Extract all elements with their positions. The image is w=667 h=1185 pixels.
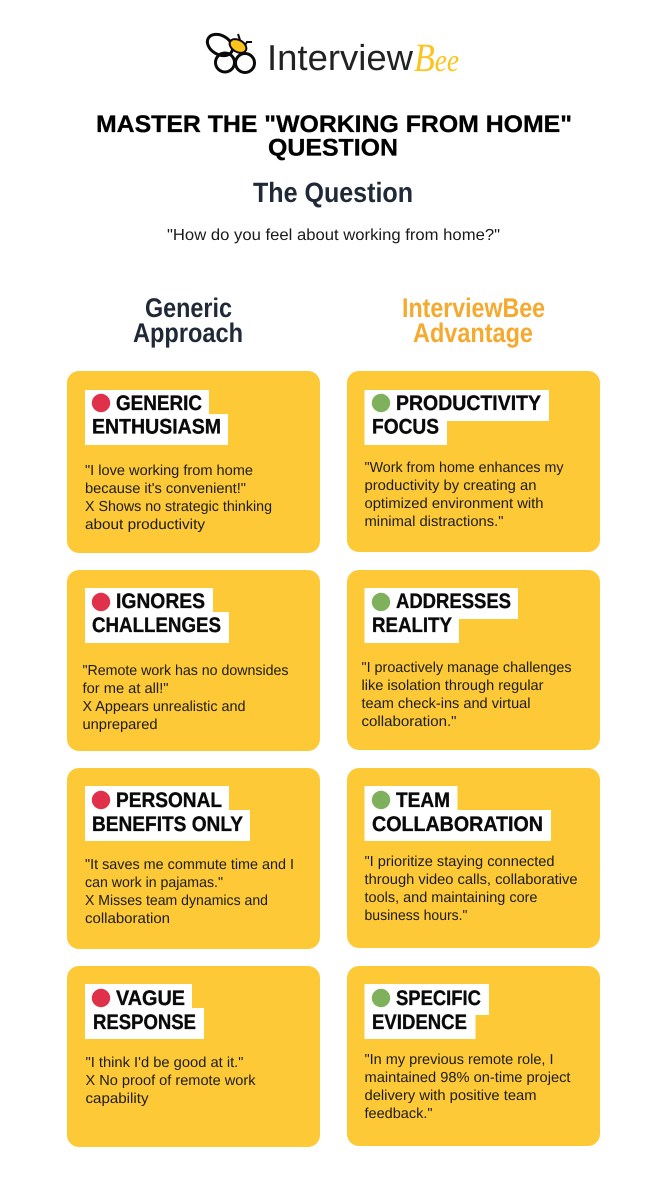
card text	[86, 1055, 256, 1107]
card text: X No proof of remote work	[86, 1073, 256, 1089]
card text: minimal distractions."	[364, 514, 504, 530]
panel: team collaboration	[347, 768, 600, 948]
status dot	[92, 593, 110, 611]
panel: generic enthusiasm	[67, 371, 320, 553]
card text: collaboration."	[362, 714, 456, 730]
card heading	[372, 789, 543, 836]
title: QUESTION	[268, 134, 398, 162]
card text: feedback."	[364, 1106, 432, 1122]
card text: through video calls, collaborative	[364, 872, 578, 888]
card heading	[372, 987, 481, 1034]
status dot	[92, 791, 110, 809]
card text: collaboration	[85, 911, 170, 927]
card heading	[93, 987, 196, 1034]
card heading	[92, 392, 221, 438]
column heading: Generic Approach	[133, 293, 243, 348]
card text	[364, 460, 564, 530]
logo word: Bee: Bee	[414, 35, 459, 80]
card heading: EVIDENCE	[372, 1011, 467, 1034]
card heading	[92, 590, 221, 637]
status dot	[372, 593, 390, 611]
card heading: CHALLENGES	[92, 614, 221, 637]
heading: The Question: The Question	[253, 177, 413, 208]
logo: InterviewBee	[204, 30, 459, 80]
card heading: RESPONSE	[93, 1011, 196, 1034]
card text	[82, 663, 288, 733]
panel: vague response	[67, 966, 320, 1147]
status dot	[372, 394, 390, 412]
card text: "In my previous remote role, I	[364, 1052, 554, 1068]
status dot	[92, 989, 110, 1007]
icon: bee	[204, 30, 254, 72]
card text: can work in pajamas."	[85, 875, 223, 891]
card text	[364, 854, 578, 924]
card text: for me at all!"	[82, 681, 168, 697]
card text: tools, and maintaining core	[364, 890, 538, 906]
card heading: ADDRESSES	[396, 590, 511, 613]
title	[96, 111, 572, 162]
card heading: BENEFITS ONLY	[92, 813, 243, 836]
panel: specific evidence	[347, 966, 600, 1146]
card text: X Misses team dynamics and	[85, 893, 268, 909]
column heading: Generic Approach: Generic	[145, 293, 232, 323]
card heading: FOCUS	[372, 416, 439, 438]
panel: ignores challenges	[67, 570, 320, 751]
panel: productivity focus	[347, 371, 600, 552]
column heading: InterviewBee Advantage	[402, 293, 545, 348]
card text: team check-ins and virtual	[362, 696, 530, 712]
question text: "How do you feel about working from home?"	[167, 227, 500, 244]
column heading: InterviewBee Advantage: Advantage	[413, 318, 533, 348]
card text: X Appears unrealistic and	[82, 699, 246, 715]
card text: optimized environment with	[364, 496, 544, 512]
card text: maintained 98% on-time project	[364, 1070, 570, 1086]
card text: about productivity	[85, 517, 206, 533]
card text: productivity by creating an	[364, 478, 536, 494]
card text: "I prioritize staying connected	[364, 854, 554, 870]
card heading: REALITY	[372, 614, 452, 637]
title: MASTER THE "WORKING FROM HOME"	[96, 111, 572, 138]
column heading: InterviewBee Advantage: InterviewBee	[402, 293, 545, 323]
card heading: PERSONAL	[116, 789, 222, 812]
card text: "I proactively manage challenges	[362, 660, 572, 676]
card text: "Work from home enhances my	[364, 460, 564, 476]
card text: like isolation through regular	[362, 678, 544, 694]
card heading: IGNORES	[116, 590, 205, 613]
card heading: TEAM	[396, 789, 450, 812]
card text	[364, 1052, 570, 1122]
column heading: Generic Approach: Approach	[133, 318, 243, 348]
card heading: ENTHUSIASM	[92, 416, 221, 438]
card text: X Shows no strategic thinking	[85, 499, 272, 515]
card text: "Remote work has no downsides	[82, 663, 288, 679]
status dot	[92, 394, 110, 412]
card heading: COLLABORATION	[372, 813, 543, 836]
card heading: GENERIC	[116, 392, 202, 415]
card text: delivery with positive team	[364, 1088, 536, 1104]
card text: "It saves me commute time and I	[85, 857, 294, 873]
card heading	[372, 590, 511, 637]
card text: capability	[86, 1091, 149, 1107]
status dot	[372, 791, 390, 809]
card heading	[372, 392, 541, 438]
card heading: SPECIFIC	[396, 987, 481, 1010]
card text: "I love working from home	[85, 463, 253, 479]
panel: addresses reality	[347, 570, 600, 750]
card text: because it's convenient!"	[85, 481, 246, 497]
card text: unprepared	[82, 717, 158, 733]
card text	[362, 660, 572, 730]
card heading	[92, 789, 243, 836]
card heading: VAGUE	[116, 987, 185, 1010]
card heading: PRODUCTIVITY	[396, 392, 541, 415]
card text: business hours."	[364, 908, 468, 924]
logo word: Interview: Interview	[267, 37, 414, 78]
card text: "I think I'd be good at it."	[86, 1055, 244, 1071]
card text	[85, 463, 272, 533]
panel: personal benefits only	[67, 768, 320, 949]
status dot	[372, 989, 390, 1007]
card text	[85, 857, 294, 927]
